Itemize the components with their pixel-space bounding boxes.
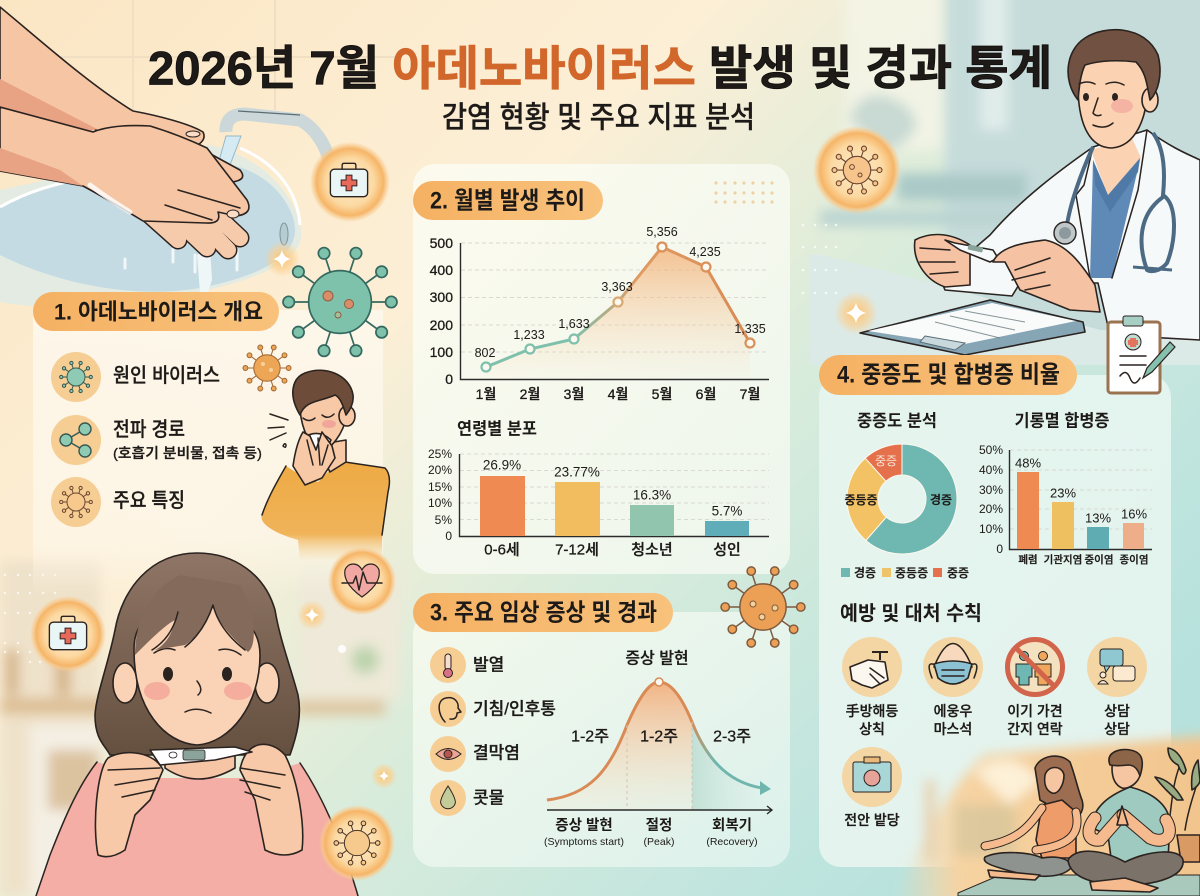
bar chart: age distribution: 7-12세: [555, 542, 599, 558]
bar chart: complications: 0: [996, 542, 1003, 556]
bar chart: complications: 23%: [1050, 486, 1076, 500]
bar chart: age distribution: 16.3%: [633, 488, 671, 502]
icon: large orange virus: [721, 567, 805, 647]
icon: small orange virus: [243, 345, 291, 391]
prevention: hand washing: [842, 637, 902, 737]
panel 4 heading: 4. 중증도 및 합병증 비율: [837, 362, 1060, 388]
illustration: yoga couple: [895, 735, 1200, 896]
icon: clipboard with pen: [1108, 316, 1175, 393]
symptom: cough: [430, 691, 556, 727]
line chart: monthly cases: 1,633: [558, 317, 590, 331]
item: key features: [51, 477, 185, 527]
prevention: mask: [923, 637, 983, 737]
line chart: monthly cases: [430, 225, 769, 402]
line chart: monthly cases: 500: [430, 235, 453, 251]
bar chart: age distribution: 26.9%: [483, 458, 521, 472]
icon: first aid kit bubble top: [310, 142, 390, 222]
course curve chart: 절정: [646, 817, 672, 834]
item: transmission route: 전파 경로: [113, 418, 185, 441]
icon: sparkle right: [834, 291, 878, 335]
panel 3 heading: [413, 593, 673, 632]
bar chart: complications: 중이염: [1085, 553, 1113, 566]
subtitle: 감염 현황 및 주요 지표 분석: [442, 102, 755, 134]
line chart: monthly cases: 3,363: [601, 280, 633, 294]
prevention: safe diagnosis: 전안 밭당: [844, 812, 900, 828]
donut chart: severity: 중증: [875, 454, 897, 468]
bar chart: complications: 13%: [1085, 510, 1111, 526]
line chart: monthly cases: 100: [430, 344, 453, 360]
line chart: monthly cases: 5,356: [646, 225, 678, 239]
bar chart: complications: 폐렴: [1018, 553, 1038, 566]
panel 2: monthly trend: [413, 164, 790, 574]
prevention: safe diagnosis: [842, 747, 902, 828]
prevention: mask: 마스석: [934, 721, 972, 737]
course curve chart: (Peak): [644, 836, 674, 848]
course curve chart: 증상 발현: [625, 650, 689, 668]
line chart: monthly cases: 0: [445, 371, 453, 387]
donut chart: severity: 중등증: [895, 566, 928, 580]
symptom: runny nose: 콧물: [473, 788, 504, 808]
line chart: monthly cases: 1월: [476, 386, 496, 402]
symptom: conjunctivitis: [430, 736, 520, 772]
bar chart: age distribution: 10%: [428, 496, 452, 510]
bar chart: complications: 16%: [1121, 506, 1147, 522]
icon: virus bubble top right: [813, 126, 901, 214]
donut chart: severity: 중등증: [844, 493, 878, 507]
bar chart: complications: 10%: [979, 522, 1003, 536]
course curve chart: 증상 발현: [555, 817, 613, 834]
course curve chart: 회복기: [712, 817, 752, 834]
line chart: monthly cases: 1,233: [513, 328, 545, 342]
line chart: monthly cases: 7월: [740, 386, 760, 402]
bar chart: age distribution: 성인: [713, 542, 741, 558]
bar chart: complications: 48%: [1015, 456, 1041, 470]
symptom: fever: [430, 647, 504, 683]
symptom: cough: 기침/인후통: [473, 700, 556, 718]
donut chart: severity: [841, 412, 969, 580]
prevention: consultation: [1087, 637, 1147, 737]
item: cause virus: 원인 바이러스: [113, 364, 220, 387]
prevention: hand washing: 手방해등: [846, 703, 898, 719]
donut chart: severity: 중증도 분석: [857, 412, 937, 430]
line chart: monthly cases: 2월: [520, 386, 540, 402]
bar chart: complications: 40%: [979, 463, 1003, 477]
bar chart: complications: 20%: [979, 502, 1003, 516]
bar chart: complications: 종이염: [1120, 553, 1148, 566]
icon: sparkle near sink: [264, 241, 300, 277]
line chart: monthly cases: 6월: [696, 386, 716, 402]
item: key features: 주요 특징: [113, 489, 185, 512]
bar chart: age distribution: [428, 447, 769, 558]
item: transmission route: [51, 415, 262, 465]
prevention: mask: 에웅우: [934, 703, 972, 719]
line chart: monthly cases: 300: [430, 289, 453, 305]
illustration: sneezing man: [262, 370, 389, 562]
line chart: monthly cases: 4월: [608, 386, 628, 402]
prevention: no contact: 간지 연락: [1007, 721, 1063, 737]
bar chart: complications: 기관지염: [1044, 553, 1082, 566]
bar chart: age distribution: 25%: [428, 447, 452, 461]
panel 2 heading: 2. 월별 발생 추이: [430, 188, 585, 214]
illustration: doctor with thermometer: [860, 30, 1200, 355]
item: cause virus: [51, 352, 220, 402]
course curve chart: (Recovery): [706, 836, 758, 848]
dots decoration: [714, 181, 774, 204]
prevention: consultation: 상담: [1104, 721, 1130, 737]
panel 1: adenovirus overview: [33, 292, 383, 595]
illustration: hands washing at sink: [0, 7, 335, 307]
prevention: hand washing: 상칙: [859, 721, 885, 737]
course curve chart: [544, 650, 772, 848]
course curve chart: (Symptoms start): [544, 836, 624, 848]
line chart: monthly cases: 1,335: [734, 322, 766, 336]
symptom: conjunctivitis: 결막염: [473, 744, 520, 762]
panel 1 heading: 1. 아데노바이러스 개요: [54, 300, 263, 324]
line chart: monthly cases: 4,235: [689, 245, 721, 259]
prevention: no contact: 이기 가견: [1007, 703, 1063, 719]
line chart: monthly cases: 802: [475, 346, 495, 360]
bar chart: age distribution: 15%: [428, 480, 452, 494]
bar chart: age distribution: 청소년: [631, 542, 673, 558]
heading: age distribution: 연령별 분포: [457, 420, 537, 438]
bar chart: complications: 50%: [979, 443, 1003, 457]
icons: sparkles near girl: [297, 600, 397, 789]
title: 2026년 7월 아데노바이러스 발생 및 경과 통계: [148, 42, 1052, 94]
symptom: fever: 발열: [473, 656, 504, 674]
panel 4 heading: [819, 355, 1077, 395]
line chart: monthly cases: 3월: [564, 386, 584, 402]
donut chart: severity: 경증: [930, 493, 952, 507]
symptom: runny nose: [430, 780, 504, 816]
item: transmission route: (호흡기 분비물, 접촉 등): [113, 445, 262, 461]
panel 4: severity and complications: [819, 355, 1171, 867]
panel 3 heading: 3. 주요 임상 증상 및 경과: [430, 600, 657, 626]
bar chart: age distribution: 5.7%: [712, 504, 742, 518]
course curve chart: 1-2주: [640, 728, 678, 746]
bar chart: complications: 기롱멸 합병증: [1014, 412, 1110, 430]
course curve chart: 2-3주: [713, 728, 751, 746]
donut chart: severity: 경증: [854, 566, 876, 580]
icon: virus bubble bottom: [319, 805, 395, 881]
panel 2 heading: [413, 181, 603, 220]
course curve chart: 1-2주: [571, 728, 609, 746]
bar chart: age distribution: 0: [445, 529, 452, 543]
heading: prevention: 예방 및 대처 수칙: [840, 602, 982, 625]
line chart: monthly cases: 400: [430, 262, 453, 278]
bar chart: complications: 30%: [979, 483, 1003, 497]
bar chart: age distribution: 0-6세: [484, 542, 520, 558]
illustration: girl holding thermometer: [36, 553, 358, 896]
bar chart: age distribution: 20%: [428, 463, 452, 477]
line chart: monthly cases: 5월: [652, 386, 672, 402]
bar chart: age distribution: 23.77%: [554, 464, 600, 480]
bar chart: age distribution: 5%: [435, 513, 452, 527]
donut chart: severity: 중증: [947, 566, 969, 580]
panel 1 heading: [33, 292, 279, 331]
prevention: no contact: [1005, 637, 1065, 737]
icon: heart monitor bubble: [328, 547, 396, 615]
icon: large teal virus: [283, 248, 397, 356]
prevention: consultation: 상담: [1104, 703, 1130, 719]
panel 3: clinical symptoms: [413, 593, 790, 867]
bar chart: complications: [979, 412, 1152, 566]
line chart: monthly cases: 200: [430, 317, 453, 333]
icon: first aid kit bubble left: [30, 596, 106, 672]
